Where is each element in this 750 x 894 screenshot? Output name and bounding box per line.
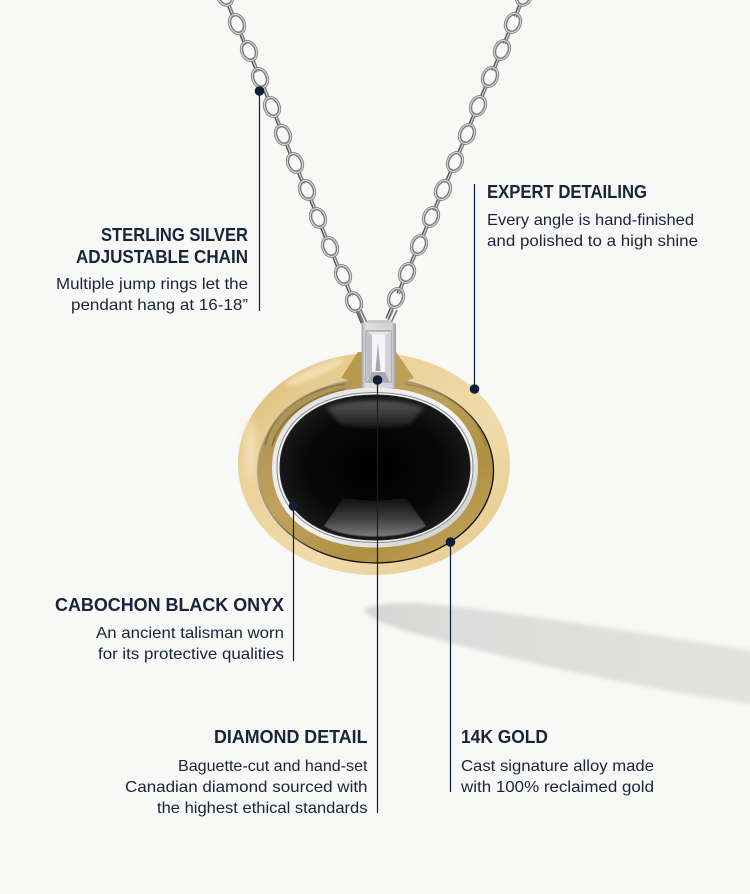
leader line — [292, 506, 294, 661]
heading line 2: ADJUSTABLE CHAIN — [76, 246, 248, 267]
callout: 14k gold — [446, 537, 654, 796]
body line 3: the highest ethical standards — [157, 800, 368, 817]
diamond facet left — [366, 331, 372, 382]
body line 1: Multiple jump rings let the — [56, 276, 248, 293]
left chain strand — [215, 0, 369, 326]
sterling silver chain — [215, 0, 535, 326]
diamond base facet — [367, 372, 390, 382]
heading line 1: STERLING SILVER — [101, 224, 248, 245]
upper right striations — [405, 384, 486, 446]
body line 1: Baguette-cut and hand-set — [178, 758, 368, 775]
heading: DIAMOND DETAIL — [214, 726, 368, 747]
leader dot — [470, 384, 479, 394]
heading: CABOCHON BLACK ONYX — [55, 594, 285, 615]
leader line — [474, 184, 476, 389]
ring inner groove — [277, 392, 473, 542]
diamond facet right — [385, 331, 391, 382]
stone body — [280, 395, 470, 540]
leader dot — [255, 86, 264, 96]
leader line — [258, 91, 260, 311]
pendant — [238, 310, 510, 575]
diamond — [366, 331, 391, 382]
top reflection — [326, 400, 424, 427]
body line 2: pendant hang at 16-18” — [71, 297, 248, 314]
diamond sparkle — [376, 342, 380, 371]
callout: cabochon black onyx — [55, 501, 298, 663]
callout: expert detailing — [470, 181, 698, 394]
leader line — [450, 542, 452, 792]
bail top cap — [364, 320, 394, 324]
gold collar triangle right — [390, 352, 414, 386]
body line 2: and polished to a high shine — [487, 233, 698, 250]
top highlight on bezel — [284, 354, 346, 390]
leader line — [376, 380, 378, 813]
leader dot — [446, 537, 455, 547]
upper left striations — [265, 384, 345, 446]
bail frame — [362, 323, 396, 388]
heading: 14K GOLD — [461, 726, 548, 747]
diamond facet centre — [372, 335, 385, 372]
leader dot — [373, 375, 382, 385]
body line 1: An ancient talisman worn — [96, 625, 284, 642]
body line 1: Cast signature alloy made — [461, 758, 654, 775]
pendant cast shadow — [363, 603, 750, 705]
callout: diamond detail — [125, 375, 382, 817]
inner gold channel — [258, 378, 494, 563]
body line 2: Canadian diamond sourced with — [125, 779, 368, 796]
white gold ring — [272, 388, 478, 548]
body line 1: Every angle is hand-finished — [487, 212, 694, 229]
outer gold bezel — [238, 353, 510, 575]
heading: EXPERT DETAILING — [487, 181, 647, 202]
bottom reflection panel — [324, 497, 426, 536]
black onyx cabochon — [280, 395, 470, 540]
leader dot — [289, 501, 298, 511]
body line 2: with 100% reclaimed gold — [460, 779, 654, 796]
callout: chain — [56, 86, 264, 314]
right chain strand — [380, 0, 535, 322]
baguette setting — [357, 310, 397, 388]
chain strands into bail — [357, 310, 397, 325]
left highlight on bezel — [244, 420, 256, 480]
body line 2: for its protective qualities — [98, 646, 284, 663]
gold collar triangle left — [341, 352, 366, 384]
